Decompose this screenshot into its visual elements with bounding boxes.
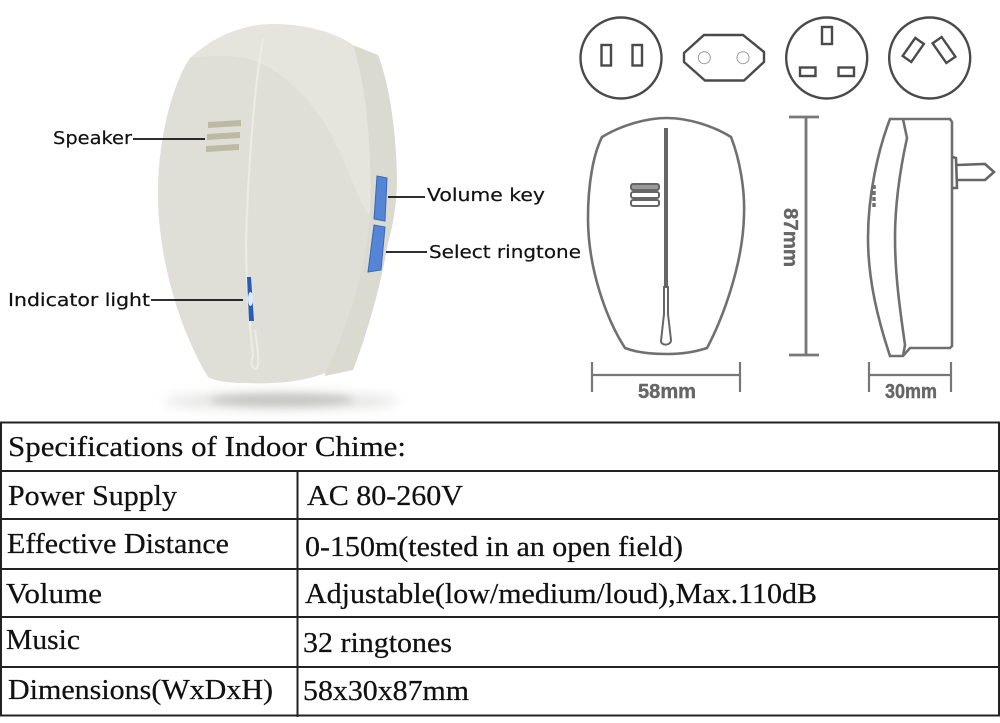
table heading: Specifications of Indoor Chime: bbox=[8, 431, 406, 463]
dimension: 87mm height bbox=[779, 117, 819, 355]
device side body bbox=[325, 45, 397, 376]
dimension: 30mm depth: 30mm bbox=[885, 381, 937, 403]
row: effective distance: 0-150m(tested in an open field) bbox=[305, 531, 683, 563]
device left shaded panel bbox=[158, 56, 370, 383]
speaker slots bbox=[631, 184, 659, 206]
callout: speaker: Speaker bbox=[53, 128, 133, 149]
row: effective distance bbox=[7, 528, 683, 563]
row: volume bbox=[6, 578, 817, 610]
row: music: Music bbox=[6, 624, 80, 656]
table grid bbox=[1, 422, 999, 717]
icon: UK plug socket bbox=[786, 18, 867, 98]
wall plug pin bbox=[952, 157, 994, 188]
row: effective distance: Effective Distance bbox=[7, 528, 229, 560]
side view line drawing bbox=[868, 119, 994, 356]
row: dimensions bbox=[8, 674, 469, 707]
row: dimensions: 58x30x87mm bbox=[303, 675, 469, 707]
indicator light bbox=[247, 277, 254, 321]
row: power supply bbox=[8, 480, 463, 512]
row: music: 32 ringtones bbox=[303, 627, 452, 659]
callout: indicator light: Indicator light bbox=[8, 290, 150, 311]
callout: volume key: Volume key bbox=[427, 185, 545, 206]
row: music bbox=[6, 624, 452, 659]
teardrop end bbox=[661, 287, 671, 345]
row: power supply: Power Supply bbox=[8, 480, 178, 512]
front view line drawing bbox=[588, 118, 744, 354]
callout: select ringtone: Select ringtone bbox=[429, 242, 581, 263]
device front face bbox=[158, 24, 370, 383]
panel: product photo of chime bbox=[158, 24, 400, 409]
icon: speaker slats bbox=[206, 120, 241, 152]
side vents bbox=[872, 185, 876, 207]
icon: EU plug socket bbox=[684, 35, 764, 80]
row: volume: Volume bbox=[6, 578, 102, 610]
dimension: 30mm depth bbox=[869, 362, 951, 403]
select ringtone button bbox=[368, 225, 385, 272]
device shadow bbox=[164, 393, 400, 409]
icon: AU plug socket bbox=[889, 18, 970, 98]
row: dimensions: Dimensions(WxDxH) bbox=[8, 674, 273, 706]
centre groove bbox=[664, 128, 668, 287]
specifications table bbox=[1, 422, 999, 717]
icon: US plug socket bbox=[580, 18, 662, 98]
volume key button bbox=[374, 176, 387, 221]
row: power supply: AC 80-260V bbox=[307, 480, 463, 512]
dimension: 58mm width: 58mm bbox=[638, 381, 696, 403]
dimension: 58mm width bbox=[592, 362, 740, 403]
centre seam bbox=[246, 38, 263, 369]
dimension: 87mm height: 87mm bbox=[779, 208, 801, 267]
row: volume: Adjustable(low/medium/loud),Max.110dB bbox=[305, 578, 817, 610]
